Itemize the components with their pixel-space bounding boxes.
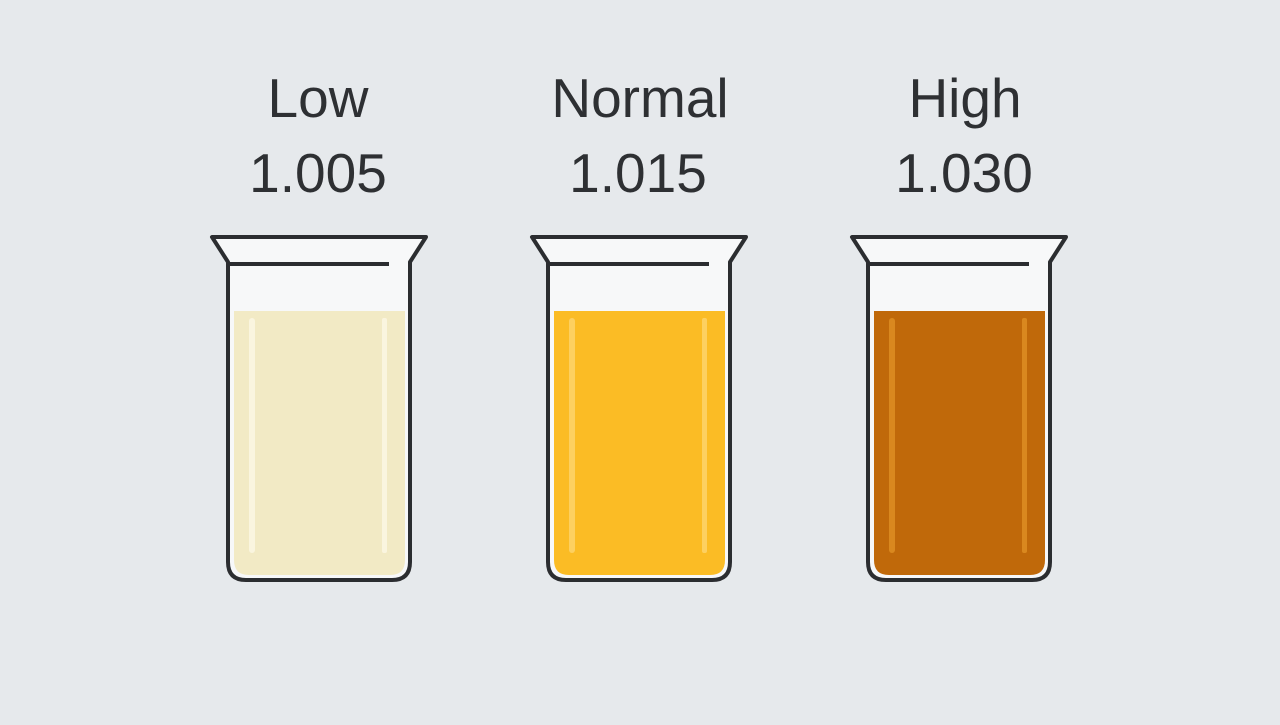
label: low: 1.005 bbox=[249, 142, 387, 204]
label: high bbox=[895, 67, 1033, 204]
beaker: low bbox=[212, 237, 426, 580]
liquid: low bbox=[234, 311, 405, 575]
label: low: Low bbox=[268, 67, 369, 129]
label: high: High bbox=[908, 67, 1022, 129]
beaker: normal bbox=[532, 237, 746, 580]
label: low bbox=[249, 67, 387, 204]
beaker: high bbox=[852, 237, 1066, 580]
label: high: 1.030 bbox=[895, 142, 1033, 204]
label: normal bbox=[551, 67, 729, 204]
label: normal: 1.015 bbox=[569, 142, 707, 204]
label: normal: Normal bbox=[551, 67, 729, 129]
